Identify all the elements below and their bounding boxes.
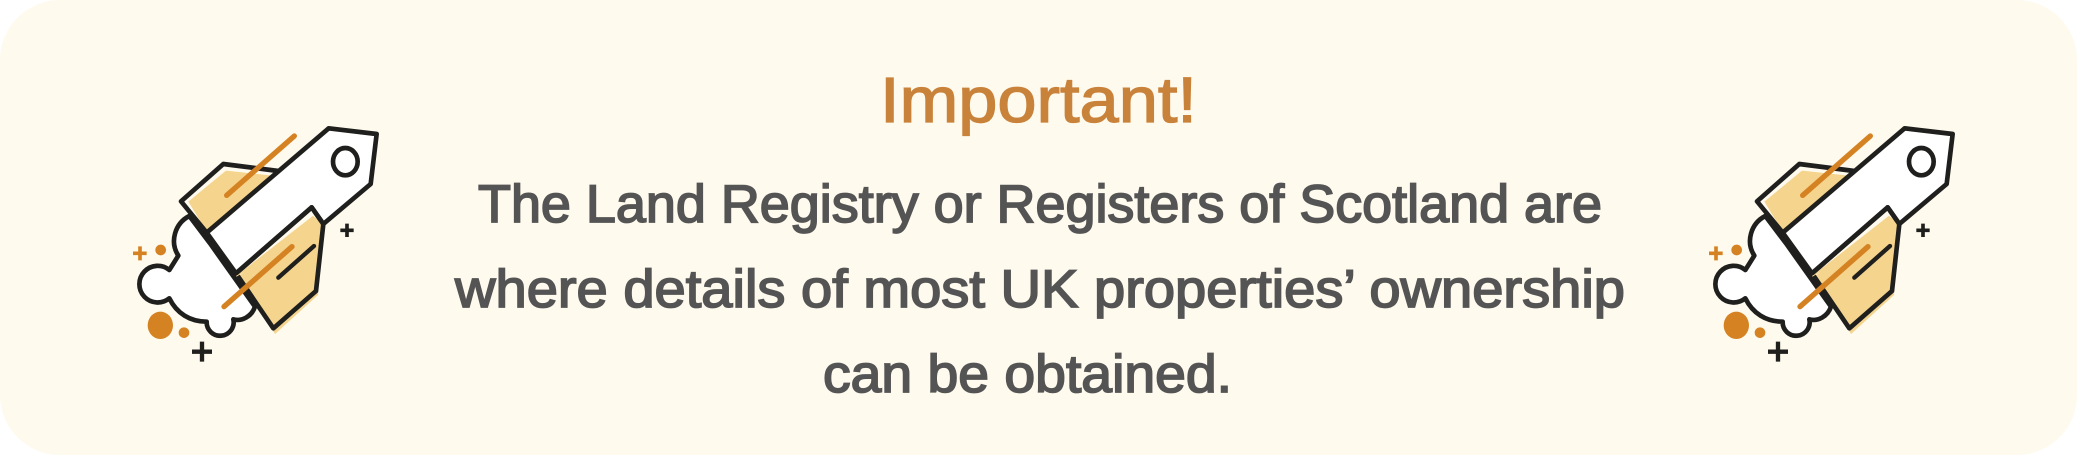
orange speed lines — [1800, 136, 1870, 307]
icon: left rocket — [133, 128, 377, 362]
icon: right rocket — [1709, 128, 1953, 362]
rocket body — [207, 128, 377, 273]
black fin line — [1854, 246, 1890, 278]
lower fin — [1812, 216, 1899, 334]
rocket window — [1909, 148, 1934, 175]
small black plus — [1916, 224, 1930, 237]
orange dots — [1724, 245, 1765, 339]
large black plus — [1768, 342, 1788, 362]
title: Important! — [880, 64, 1197, 136]
orange plus — [133, 246, 147, 260]
body text: The Land Registry or Registers of Scotland are — [478, 175, 1602, 234]
body text: where details of most UK properties’ ownership — [454, 260, 1625, 319]
upper fin — [1757, 164, 1854, 233]
orange dots — [148, 245, 189, 339]
rocket window — [333, 148, 358, 175]
lower fin — [236, 216, 323, 334]
rocket body — [1783, 128, 1953, 273]
orange plus — [1709, 246, 1723, 260]
small black plus — [340, 224, 354, 237]
body text: can be obtained. — [823, 345, 1232, 404]
rocket smoke cloud — [139, 216, 255, 336]
orange speed lines — [224, 136, 294, 307]
black fin line — [278, 246, 314, 278]
large black plus — [192, 342, 212, 362]
body text — [454, 175, 1625, 404]
upper fin — [181, 164, 278, 233]
rocket smoke cloud — [1715, 216, 1831, 336]
